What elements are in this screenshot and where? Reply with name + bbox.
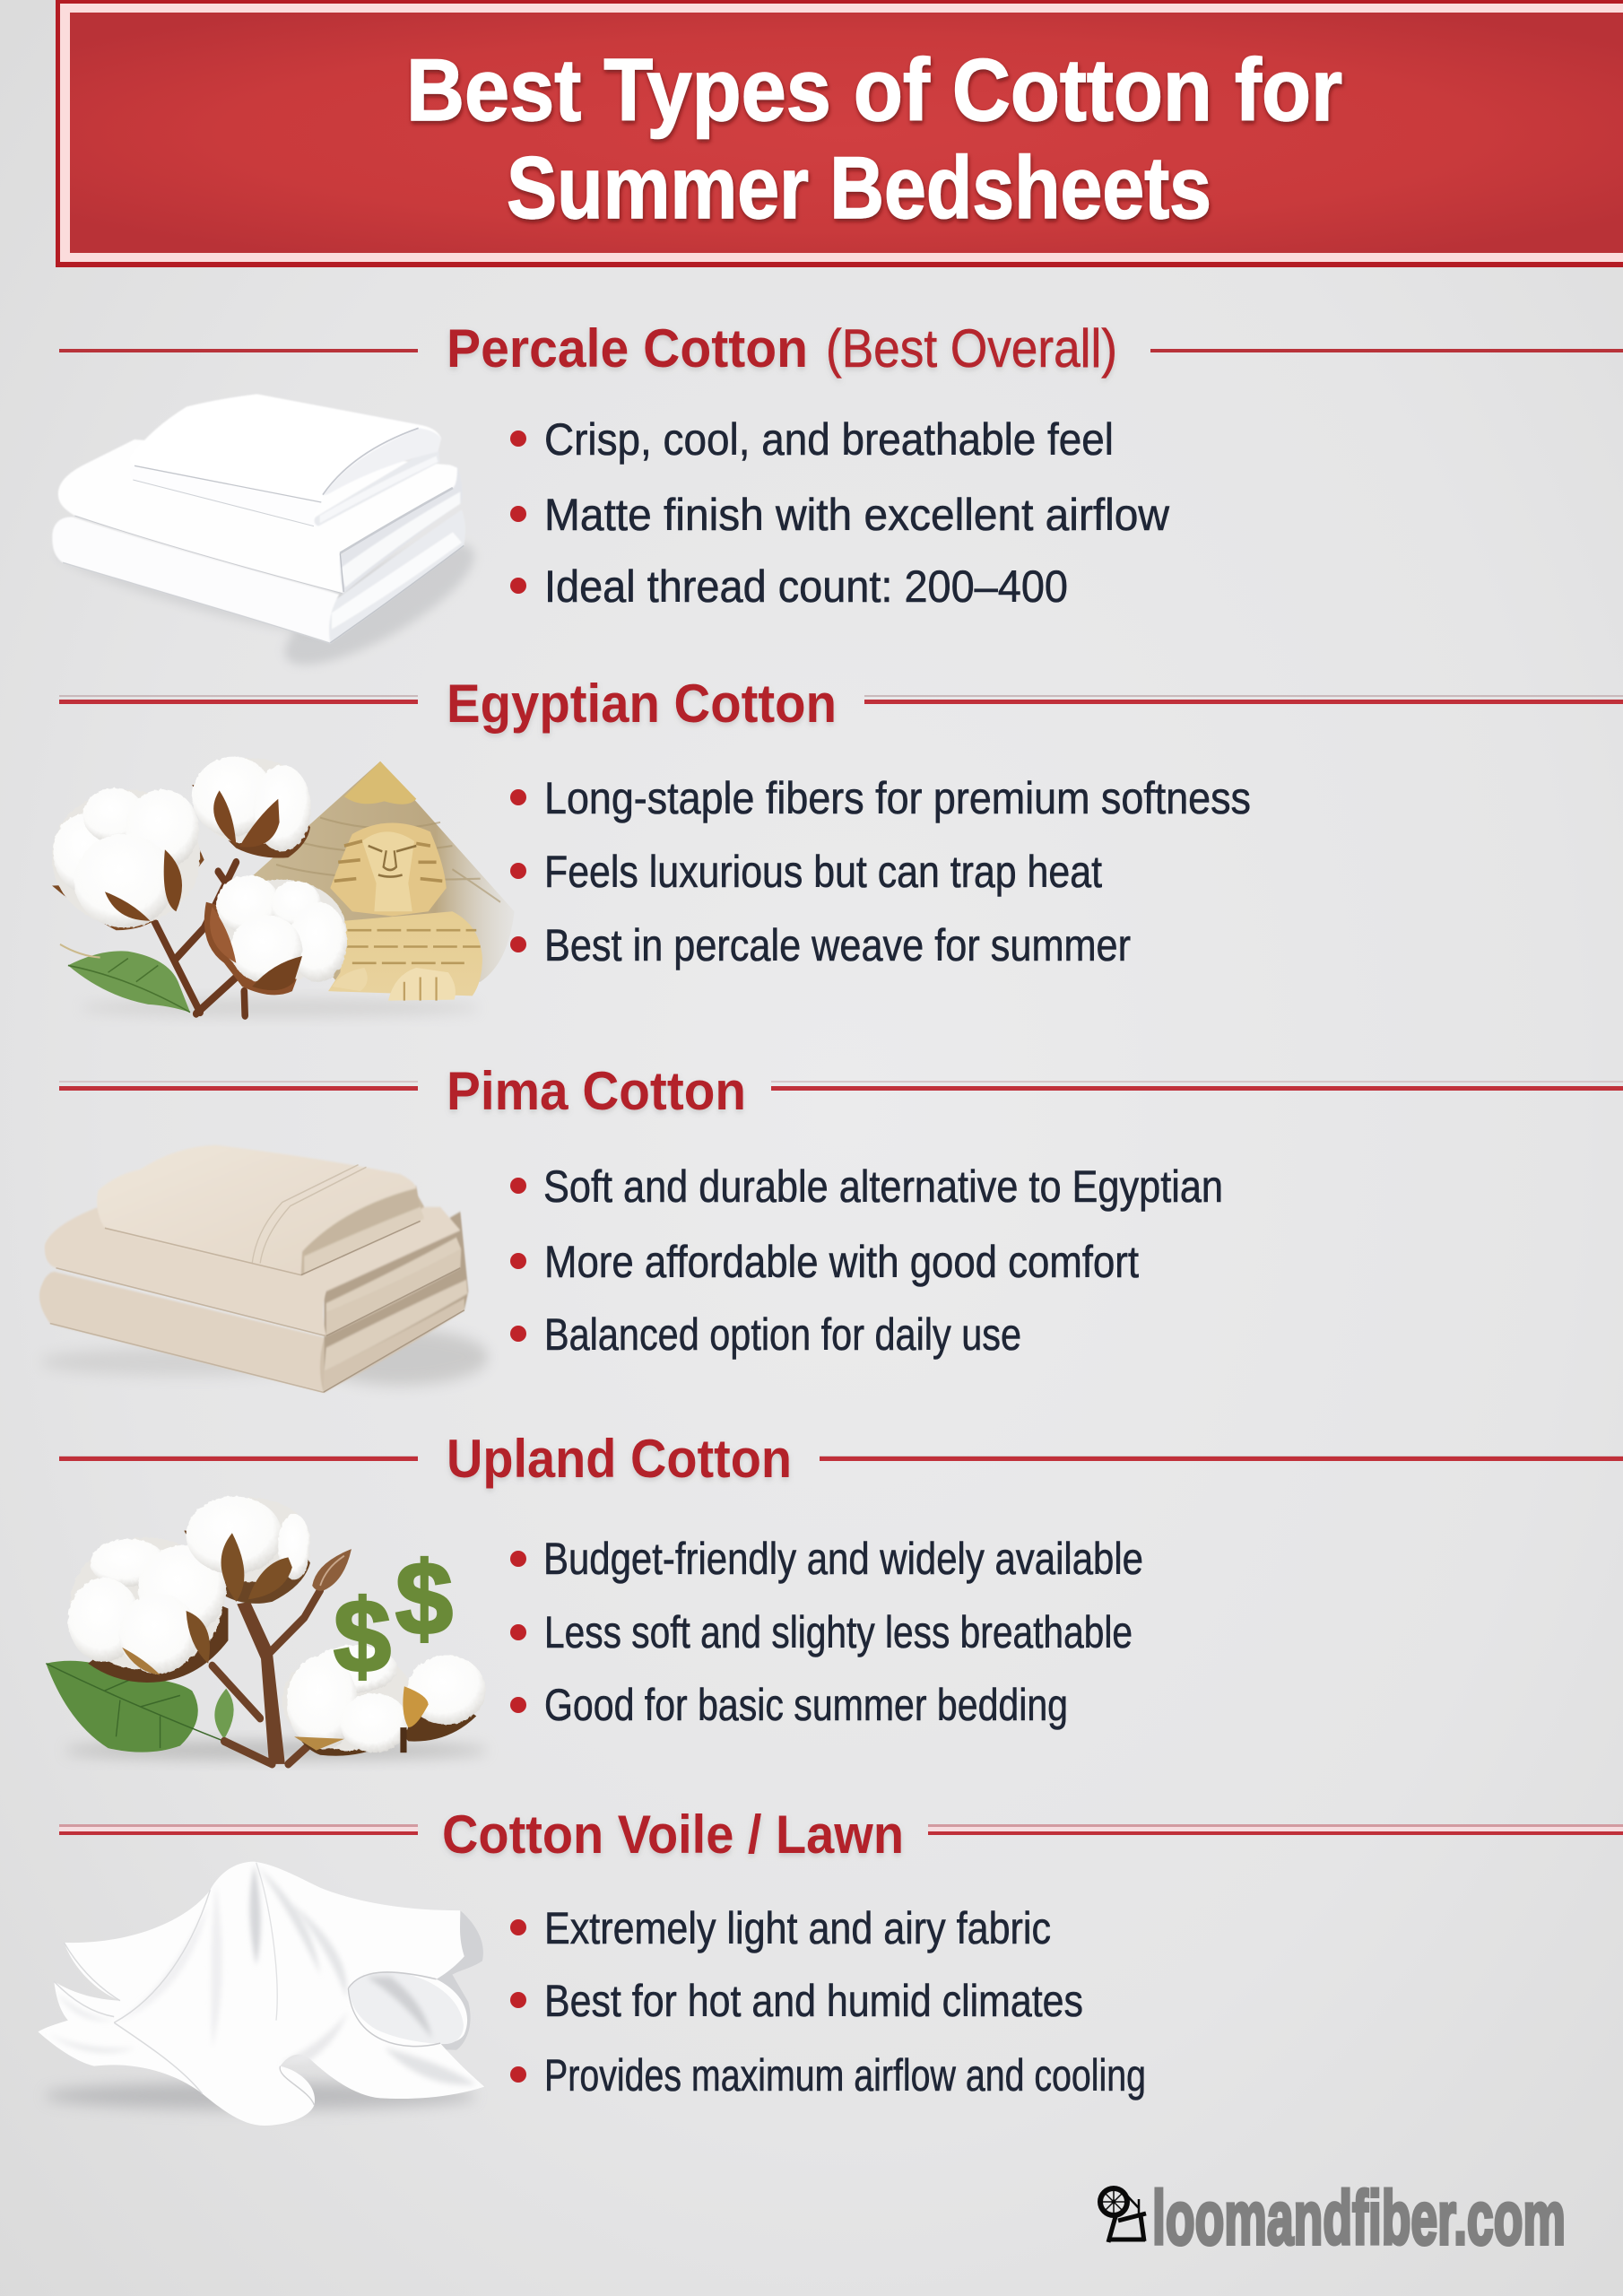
bullet list: egyptian: Best in percale weave for summer bbox=[544, 920, 1131, 970]
bullet list: percale: Crisp, cool, and breathable feel bbox=[544, 414, 1114, 465]
bullet list: upland bbox=[510, 1534, 1143, 1730]
bullet list: percale: Ideal thread count: 200–400 bbox=[544, 561, 1068, 612]
bullet list: egyptian: Long-staple fibers for premium softness bbox=[544, 773, 1251, 823]
bullet list: pima: Soft and durable alternative to Egyptian bbox=[543, 1161, 1223, 1212]
bullet list: percale: Matte finish with excellent airflow bbox=[544, 490, 1170, 540]
bullet list: voile: Best for hot and humid climates bbox=[544, 1976, 1083, 2026]
bullet list: voile: Extremely light and airy fabric bbox=[544, 1903, 1051, 1953]
panel: egyptian cotton bbox=[52, 674, 1623, 1016]
bullet list: pima: More affordable with good comfort bbox=[544, 1237, 1139, 1287]
panel: pima cotton bbox=[39, 1061, 1623, 1392]
bullet list: upland: Less soft and slighty less breathable bbox=[544, 1607, 1133, 1657]
heading: percale bbox=[59, 318, 1623, 378]
heading: percale: Percale Cotton bbox=[447, 318, 808, 378]
illustration: cotton plant with dollar signs bbox=[46, 1496, 489, 1764]
icon: green dollar signs: $ bbox=[334, 1579, 391, 1694]
icon: green dollar signs: $ bbox=[395, 1542, 453, 1657]
title bbox=[406, 40, 1342, 237]
illustration: white folded sheets bbox=[52, 394, 490, 686]
heading: egyptian: Egyptian Cotton bbox=[447, 674, 837, 734]
bullet list: voile bbox=[510, 1903, 1146, 2100]
title: Summer Bedsheets bbox=[507, 138, 1211, 237]
heading: pima bbox=[59, 1061, 1623, 1121]
panel: upland cotton bbox=[46, 1429, 1623, 1764]
bullet list: voile: Provides maximum airflow and cooling bbox=[544, 2050, 1146, 2100]
bullet list: pima bbox=[510, 1161, 1223, 1360]
panel: percale cotton bbox=[52, 318, 1623, 686]
heading: voile: Cotton Voile / Lawn bbox=[442, 1805, 904, 1865]
heading: upland bbox=[59, 1429, 1623, 1489]
heading: voile bbox=[59, 1805, 1623, 1865]
bullet list: percale bbox=[510, 414, 1170, 612]
bullet list: upland: Good for basic summer bedding bbox=[544, 1680, 1068, 1730]
illustration: cotton bolls and sphinx bbox=[52, 757, 515, 1016]
bullet list: egyptian: Feels luxurious but can trap heat bbox=[544, 847, 1102, 897]
title: Best Types of Cotton for bbox=[406, 40, 1342, 139]
bullet list: egyptian bbox=[510, 773, 1251, 970]
heading: upland: Upland Cotton bbox=[447, 1429, 792, 1489]
illustration: beige folded sheets bbox=[39, 1145, 489, 1392]
panel: cotton voile / lawn bbox=[38, 1805, 1623, 2126]
icon: green dollar signs bbox=[334, 1542, 453, 1694]
illustration: draped white fabric bbox=[38, 1862, 484, 2126]
bullet list: pima: Balanced option for daily use bbox=[544, 1309, 1021, 1360]
heading: pima: Pima Cotton bbox=[447, 1061, 746, 1121]
icon: spinning wheel bbox=[1100, 2188, 1146, 2242]
heading: percale: (Best Overall) bbox=[826, 318, 1117, 378]
bullet list: upland: Budget-friendly and widely available bbox=[543, 1534, 1143, 1584]
title banner bbox=[56, 0, 1623, 267]
heading: egyptian bbox=[59, 674, 1623, 734]
